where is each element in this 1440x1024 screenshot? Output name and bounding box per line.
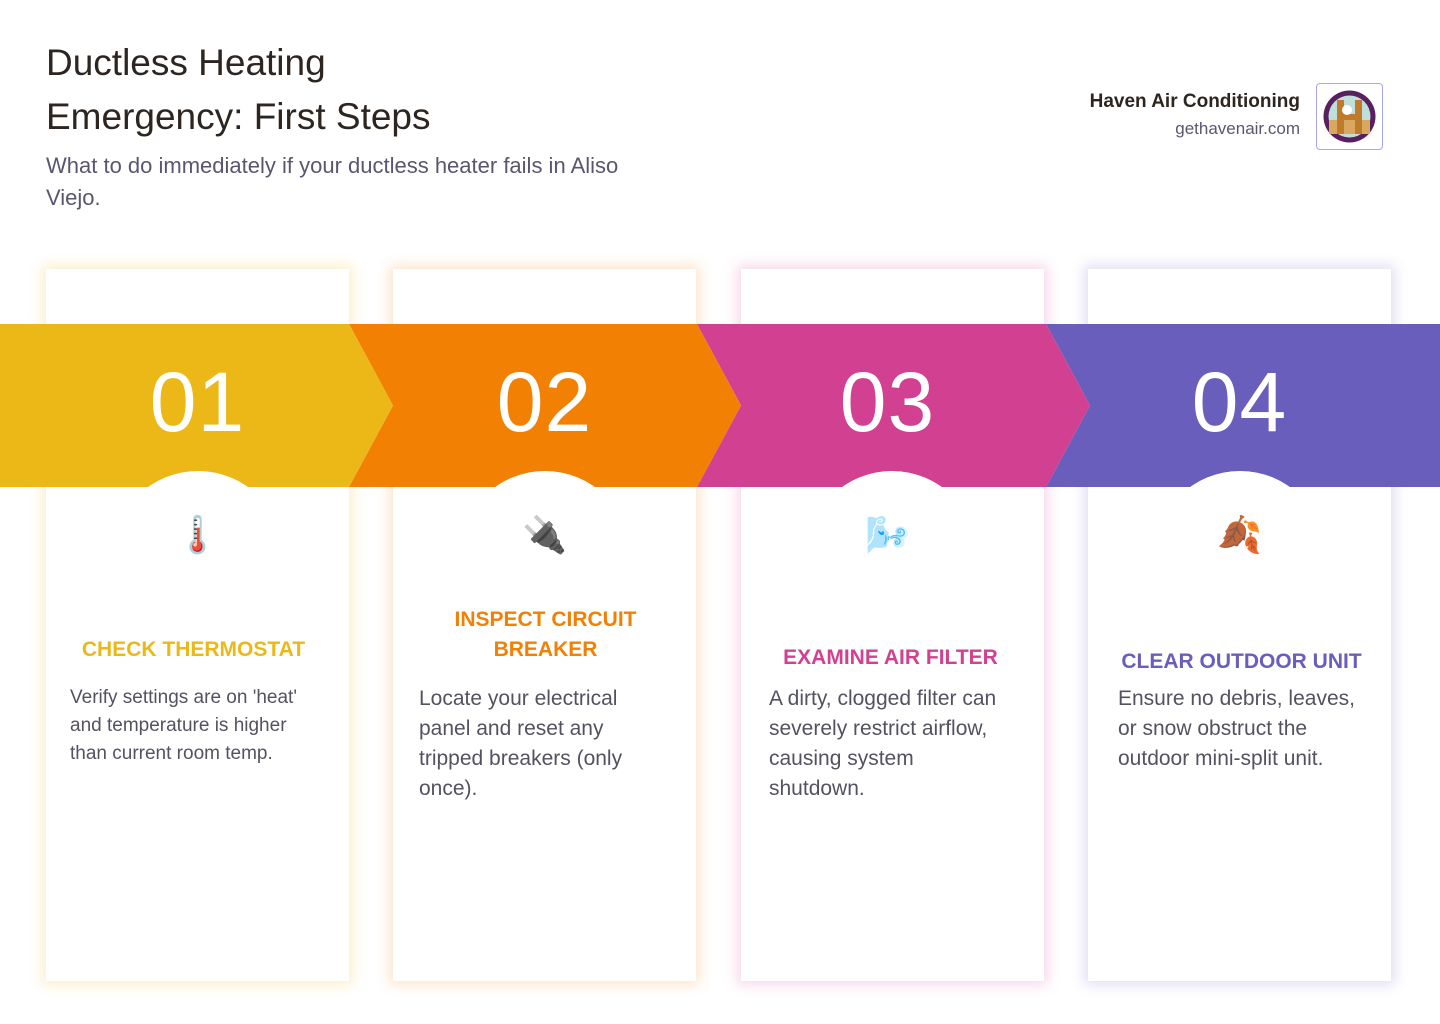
title: Emergency: First Steps [46,96,431,137]
text 3: A dirty, clogged filter can severely restrict airflow, causing system shutdown. [769,687,996,800]
subtitle: What to do immediately if your ductless heater fails in Aliso Viejo. [46,153,618,210]
heading 2: INSPECT CIRCUIT [454,608,636,631]
title: Ductless Heating [46,42,326,83]
icon: wind face: 🌬️ [865,514,910,556]
brand name: Haven Air Conditioning [1090,91,1300,112]
title [46,42,431,137]
heading 4: CLEAR OUTDOOR UNIT [1121,650,1362,673]
icon circle 3 [806,471,978,643]
card 1 [46,269,349,981]
heading 1: CHECK THERMOSTAT [82,638,305,661]
icon circle 4 [1154,471,1326,643]
number 04: 04 [1192,355,1287,449]
brand block [1090,83,1383,150]
heading 2 [454,608,636,661]
icon: plug: 🔌 [522,514,567,556]
icon: thermometer: 🌡️ [175,514,220,556]
card 3 [741,269,1044,981]
number 02: 02 [497,355,592,449]
text 2: Locate your electrical panel and reset any tripped breakers (only once). [419,687,622,800]
card 4 [1088,269,1391,981]
text 1: Verify settings are on 'heat' and temperature is higher than current room temp. [70,687,297,764]
number 03: 03 [840,355,935,449]
icon circle 2 [459,471,631,643]
brand url: gethavenair.com [1175,119,1300,138]
heading 2: BREAKER [494,638,597,661]
chevron band [0,324,1440,487]
number 01: 01 [150,355,245,449]
logo [1316,83,1383,150]
card 2 [393,269,696,981]
icon: leaves: 🍂 [1217,514,1262,556]
heading 3: EXAMINE AIR FILTER [783,646,998,669]
text 4: Ensure no debris, leaves, or snow obstruct the outdoor mini-split unit. [1118,687,1355,770]
icon circle 1 [112,471,284,643]
